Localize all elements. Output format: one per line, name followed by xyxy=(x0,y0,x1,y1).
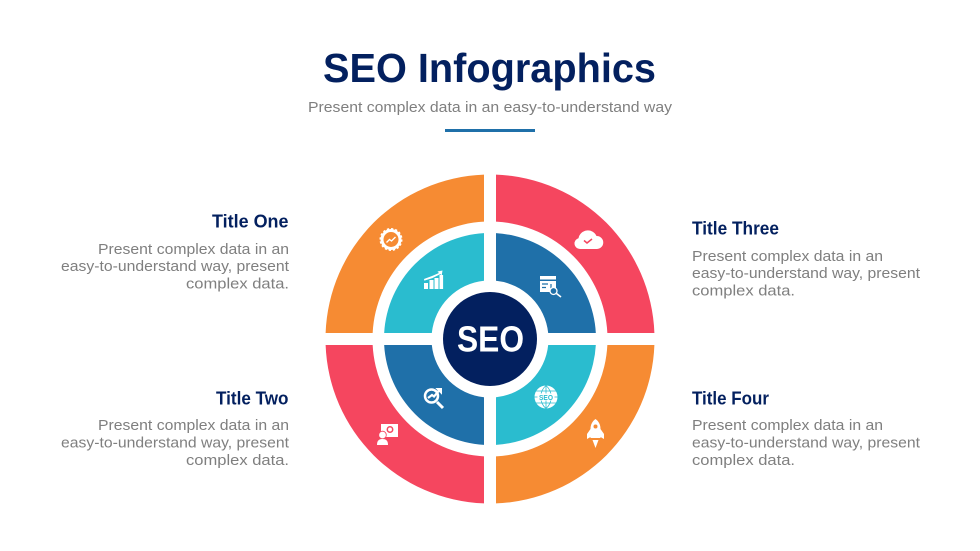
icon: cloud with check xyxy=(574,230,603,249)
icon: presenter with gear board xyxy=(377,424,398,445)
inner segment: top right xyxy=(496,233,596,333)
title: SEO Infographics xyxy=(323,45,656,91)
inner segment: bottom left xyxy=(384,345,484,445)
circular diagram xyxy=(326,175,654,503)
text block: title four: easy-to-understand way, present xyxy=(692,436,920,452)
icon: gear with trend xyxy=(380,229,402,250)
icon: rising bars xyxy=(424,270,443,289)
outer segment: bottom right xyxy=(496,345,654,503)
text block: title one: complex data. xyxy=(186,276,289,292)
text block: title three: easy-to-understand way, present xyxy=(692,266,920,282)
icon: SEO globe: SEO xyxy=(539,395,554,402)
text block: title one: easy-to-understand way, present xyxy=(61,259,289,275)
center label: SEO xyxy=(457,318,524,360)
inner segment: bottom right xyxy=(496,345,596,445)
icon: SEO globe xyxy=(534,386,558,408)
text block: title two: Title Two xyxy=(216,388,288,408)
text block: title three: Title Three xyxy=(692,218,779,238)
outer segment: bottom left xyxy=(326,345,484,503)
text block: title one: Title One xyxy=(212,212,288,232)
text block: title two: complex data. xyxy=(186,453,289,469)
outer segment: top right xyxy=(496,175,654,333)
text block: title three: Present complex data in an xyxy=(692,249,883,265)
subtitle: Present complex data in an easy-to-understand way xyxy=(308,99,673,116)
icon: rocket xyxy=(587,419,604,448)
text block: title one xyxy=(61,212,289,292)
inner segment: top left xyxy=(384,233,484,333)
text block: title two xyxy=(61,388,289,469)
text block: title three xyxy=(692,218,920,300)
text block: title four xyxy=(692,388,920,469)
center circle xyxy=(443,292,537,386)
text block: title one: Present complex data in an xyxy=(98,242,289,258)
icon: web page with magnifier xyxy=(540,276,561,297)
text block: title two: Present complex data in an xyxy=(98,418,289,434)
title underline xyxy=(445,129,535,132)
text block: title three: complex data. xyxy=(692,284,795,300)
text block: title four: Title Four xyxy=(692,388,769,408)
outer segment: top left xyxy=(326,175,484,333)
text block: title four: Present complex data in an xyxy=(692,418,883,434)
text block: title two: easy-to-understand way, present xyxy=(61,436,289,452)
text block: title four: complex data. xyxy=(692,453,795,469)
icon: magnifier with arrow xyxy=(425,388,443,408)
